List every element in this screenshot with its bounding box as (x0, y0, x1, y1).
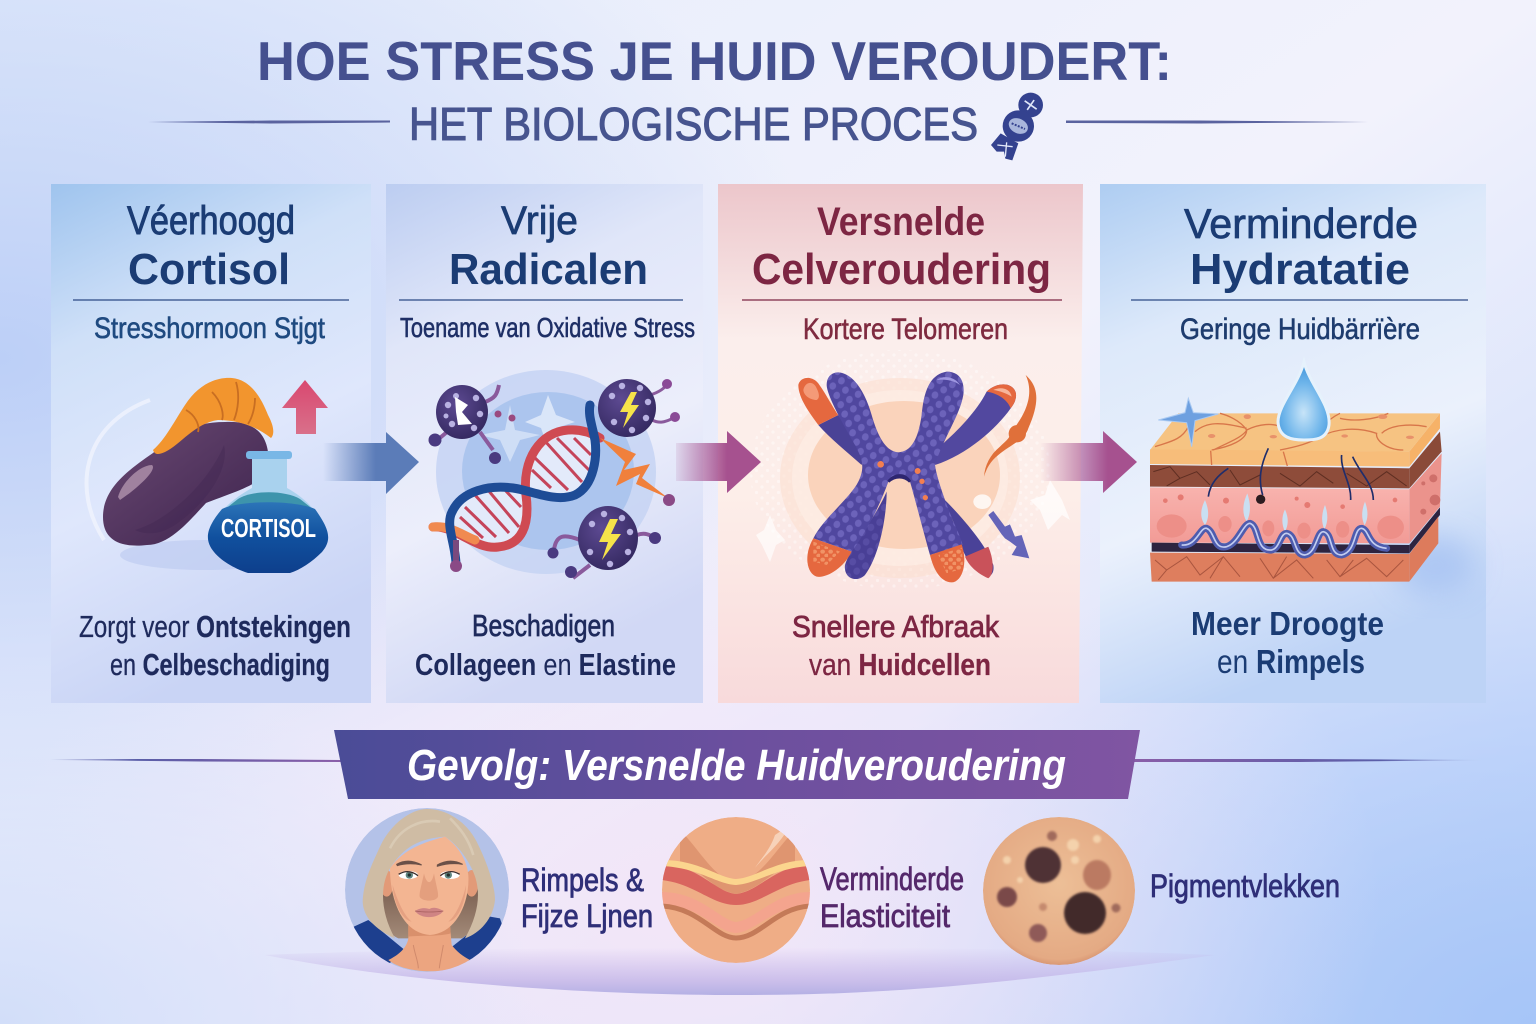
body text (792, 609, 999, 682)
body text: Beschadigen (472, 608, 615, 643)
subheading: Geringe Huidbärrïère (1180, 313, 1420, 346)
orange marker (984, 375, 1036, 477)
heading: Cortisol (128, 245, 290, 294)
top surface (1150, 413, 1440, 452)
ears (383, 870, 392, 897)
hair (363, 809, 495, 938)
label: elasticiteit: Verminderde (820, 861, 964, 897)
body text (79, 609, 351, 682)
subheading: Toename van Oxidative Stress (400, 312, 695, 343)
heading: Celveroudering (752, 245, 1051, 294)
title: HOE STRESS JE HUID VEROUDERT: (257, 30, 1172, 92)
nose (420, 873, 438, 901)
body text: Collageen en Elastine (415, 647, 676, 682)
body text: Zorgt veor Ontstekingen (79, 609, 351, 644)
subheading: Kortere Telomeren (803, 313, 1008, 346)
neck (388, 925, 470, 971)
illustration: skin layers (1150, 362, 1475, 595)
arrow: radicalen to celveroudering (676, 431, 761, 493)
flask label: CORTISOL (221, 513, 316, 543)
side faces (1409, 453, 1442, 543)
collar (354, 916, 502, 963)
panel: cortisol (51, 184, 371, 703)
icon: pigment spots (983, 817, 1135, 965)
icon: elasticity waves (662, 817, 810, 963)
banner: gevolg (334, 730, 1140, 799)
body text: en Rimpels (1217, 643, 1365, 680)
body text (1191, 605, 1384, 680)
icon: dna (991, 93, 1043, 160)
panel: vrije radicalen (386, 184, 703, 703)
icon: up arrow (282, 380, 328, 434)
brows (397, 861, 463, 866)
arrow: cortisol to radicalen (323, 432, 419, 494)
label: rimpels: Fijze Ljnen (521, 898, 653, 934)
body text: Snellere Afbraak (792, 609, 999, 644)
heading: Versnelde (817, 200, 985, 244)
panel: celveroudering (718, 184, 1083, 703)
back arms (798, 378, 1016, 579)
main x (813, 372, 964, 555)
subheading: Stresshormoon Stjgt (94, 312, 326, 345)
illustration: dna and free radicals (428, 370, 680, 578)
heading (449, 199, 648, 294)
label: elasticiteit: Elasticiteit (820, 898, 950, 934)
back hair (383, 872, 478, 938)
heading (127, 199, 295, 294)
heading: Véerhoogd (127, 199, 295, 243)
heading (752, 200, 1051, 294)
face (390, 837, 468, 935)
capillary (1201, 493, 1367, 532)
telomere tips (807, 461, 964, 582)
icon: star (1158, 398, 1218, 447)
radical 2 (598, 379, 680, 437)
eyes (399, 871, 418, 879)
platform (265, 948, 1215, 995)
icon: kidney with cortisol flask (87, 378, 328, 573)
heading: Radicalen (449, 245, 648, 294)
hairs (1208, 448, 1373, 500)
body text (415, 608, 676, 682)
body text: en Celbeschadiging (110, 647, 330, 682)
heading: Verminderde (1184, 200, 1418, 247)
lips (415, 908, 443, 917)
panel: hydratatie (1100, 184, 1486, 703)
heading (1184, 200, 1418, 294)
heading: Hydratatie (1190, 245, 1410, 294)
dermis (1150, 465, 1409, 488)
radical 1 (428, 385, 516, 464)
body text: Meer Droogte (1191, 605, 1384, 642)
label: elasticiteit (820, 861, 964, 934)
label: rimpels: Rimpels & (521, 862, 644, 898)
body text: van Huidcellen (809, 647, 991, 682)
heading: Vrije (501, 199, 578, 243)
down arrow (988, 511, 1029, 558)
illustration: chromosome with short telomeres (750, 350, 1070, 590)
subtitle: HET BIOLOGISCHE PROCES (409, 98, 978, 150)
radical 3 (548, 506, 661, 578)
label: pigmentvlekken: Pigmentvlekken (1150, 868, 1340, 904)
arrow: celveroudering to hydratatie (1040, 431, 1137, 493)
icon: portrait (345, 808, 509, 972)
banner: gevolg: Gevolg: Versnelde Huidveroudering (407, 741, 1066, 790)
label: rimpels (521, 862, 653, 934)
